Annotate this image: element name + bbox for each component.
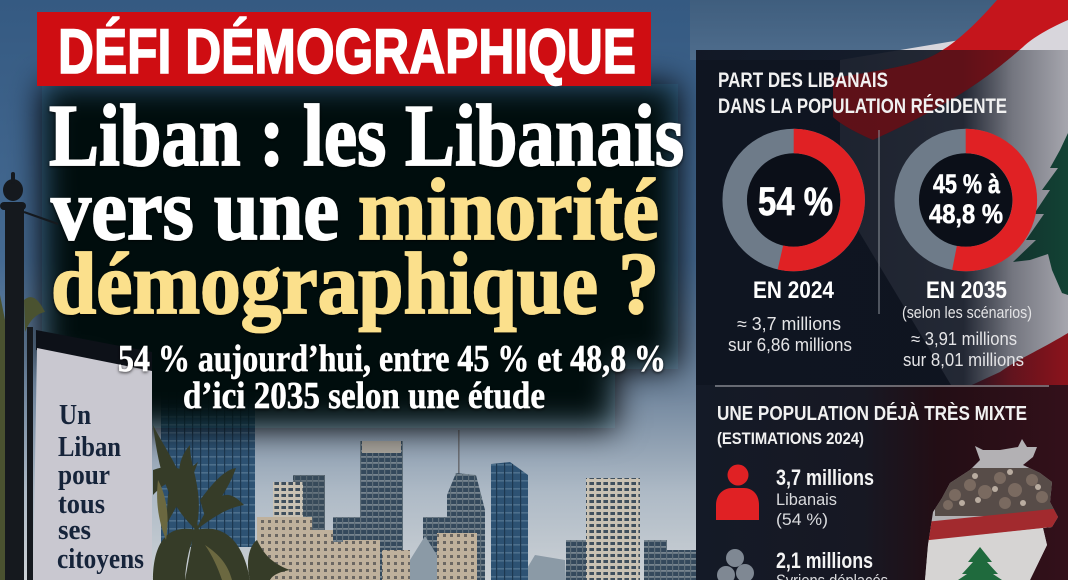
- subtitle: [118, 338, 666, 417]
- caption 2035: EN 2035: [926, 277, 1007, 304]
- section heading: share of Lebanese: [718, 69, 1007, 118]
- caption 2024: EN 2024: [753, 277, 835, 304]
- banner pole: [0, 172, 58, 580]
- caption 2024: sur 6,86 millions: [728, 335, 852, 355]
- section heading: share of Lebanese: DANS LA POPULATION RÉSIDENTE: [718, 95, 1007, 118]
- donut chart 2035: [907, 141, 1025, 259]
- Lebanese flag behind the panel: [833, 0, 1068, 400]
- palm trees: [153, 425, 290, 580]
- banner text: citoyens: [57, 544, 144, 575]
- donut chart 2024: 54 %: [758, 180, 833, 224]
- section heading: share of Lebanese: PART DES LIBANAIS: [718, 69, 888, 92]
- icon: grey group: [717, 549, 754, 580]
- donut chart 2024: [735, 141, 853, 259]
- dark vignette behind the headline: [42, 84, 678, 428]
- headline: Liban : les Libanais: [49, 88, 684, 185]
- stat: Syrians: 2,1 millions: [776, 548, 873, 573]
- caption 2035: (selon les scénarios): [902, 303, 1032, 322]
- headline: vers une: [51, 162, 339, 259]
- background: sky behind right panel: [690, 0, 1068, 60]
- stat: Lebanese: [776, 465, 874, 529]
- cedar on flag: [1013, 133, 1068, 295]
- subtitle: d’ici 2035 selon une étude: [183, 375, 545, 417]
- headline: démographique ?: [51, 236, 659, 333]
- donut chart 2035: 45 % à: [933, 169, 1001, 199]
- donut chart 2035: 48,8 %: [929, 199, 1003, 229]
- banner text: Liban: [58, 432, 121, 463]
- caption 2035: sur 8,01 millions: [903, 350, 1024, 370]
- caption 2024: ≈ 3,7 millions: [737, 314, 841, 334]
- banner text: pour: [58, 460, 110, 491]
- left foliage: [0, 295, 45, 580]
- background photo: sky: [0, 0, 696, 580]
- banner text: Un: [59, 400, 91, 431]
- skyline of Beirut towers: [161, 377, 696, 580]
- caption 2035: [902, 277, 1032, 370]
- caption 2035: ≈ 3,91 millions: [911, 329, 1017, 349]
- headline: [49, 88, 684, 333]
- banner text: ses: [58, 515, 91, 546]
- stat: Lebanese: (54 %): [776, 510, 828, 529]
- caption 2024: [728, 277, 852, 355]
- stat: Lebanese: 3,7 millions: [776, 465, 874, 490]
- map of Lebanon: [925, 439, 1058, 580]
- section heading: mixed population: [717, 402, 1027, 448]
- panel background: [696, 0, 1068, 580]
- banner text: tous: [58, 489, 105, 520]
- red kicker banner: DÉFI DÉMOGRAPHIQUE: [58, 17, 636, 87]
- icon: red person: [716, 464, 759, 520]
- stat: Lebanese: Libanais: [776, 490, 837, 509]
- banner: [33, 330, 152, 580]
- banner text: [57, 400, 144, 575]
- subtitle: 54 % aujourd’hui, entre 45 % et 48,8 %: [118, 338, 666, 380]
- headline: minorité: [358, 162, 659, 259]
- flag red band showing through: [833, 50, 1020, 140]
- section heading: mixed population: (ESTIMATIONS 2024): [717, 429, 864, 448]
